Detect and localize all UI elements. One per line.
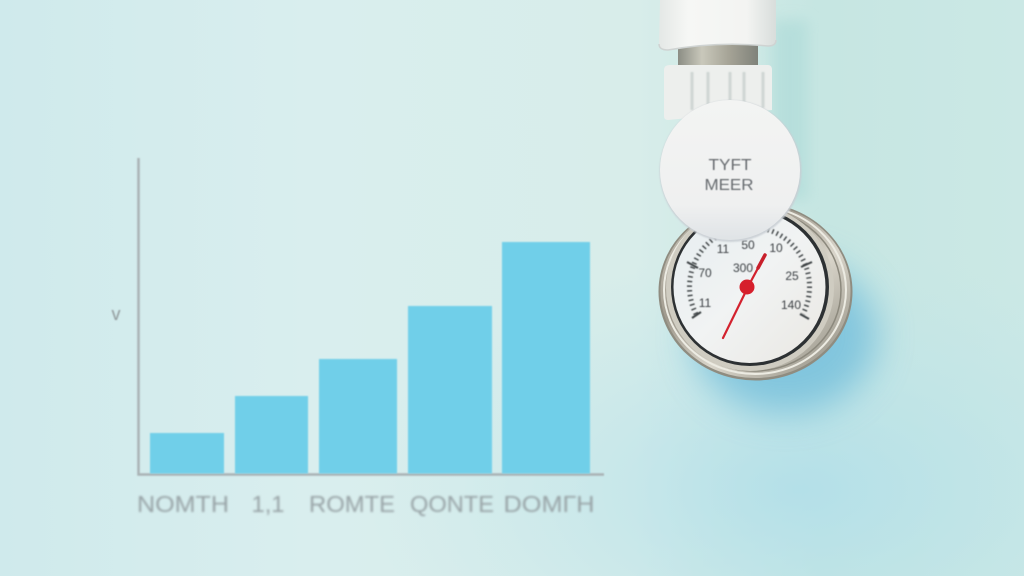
dial numbers: 300	[733, 261, 753, 275]
y axis label: v	[112, 304, 120, 324]
meter cap: MEER	[704, 177, 754, 194]
dial numbers: 11	[699, 296, 712, 310]
bars	[150, 242, 590, 474]
dial numbers: 10	[769, 241, 783, 255]
gauge face	[674, 211, 826, 363]
chart axes	[138, 158, 604, 474]
gauge chrome rings	[658, 202, 852, 380]
x axis labels: DOMГH	[504, 491, 594, 517]
dial numbers: 140	[781, 298, 801, 312]
dial numbers	[698, 238, 801, 312]
x axis labels: QONTE	[410, 491, 494, 517]
dial numbers: 70	[698, 266, 712, 280]
x axis labels: 1,1	[252, 491, 284, 517]
dial numbers: 11	[717, 242, 730, 256]
threaded pipe	[678, 42, 758, 66]
shadow cast by meter	[693, 20, 877, 413]
top tube	[659, 0, 776, 50]
x axis labels: NOMTH	[137, 491, 229, 517]
ribbed collar	[664, 65, 772, 120]
dial numbers: 25	[785, 269, 799, 283]
water meter	[658, 0, 852, 380]
bar chart	[112, 158, 604, 517]
tick marks	[687, 227, 812, 319]
x axis labels	[137, 491, 594, 517]
cap label: TYFT	[708, 157, 752, 174]
meter cap	[660, 100, 802, 242]
gauge	[658, 202, 852, 380]
needle	[723, 255, 765, 338]
dial numbers: 50	[741, 238, 755, 252]
x axis labels: ROMTE	[309, 491, 395, 517]
